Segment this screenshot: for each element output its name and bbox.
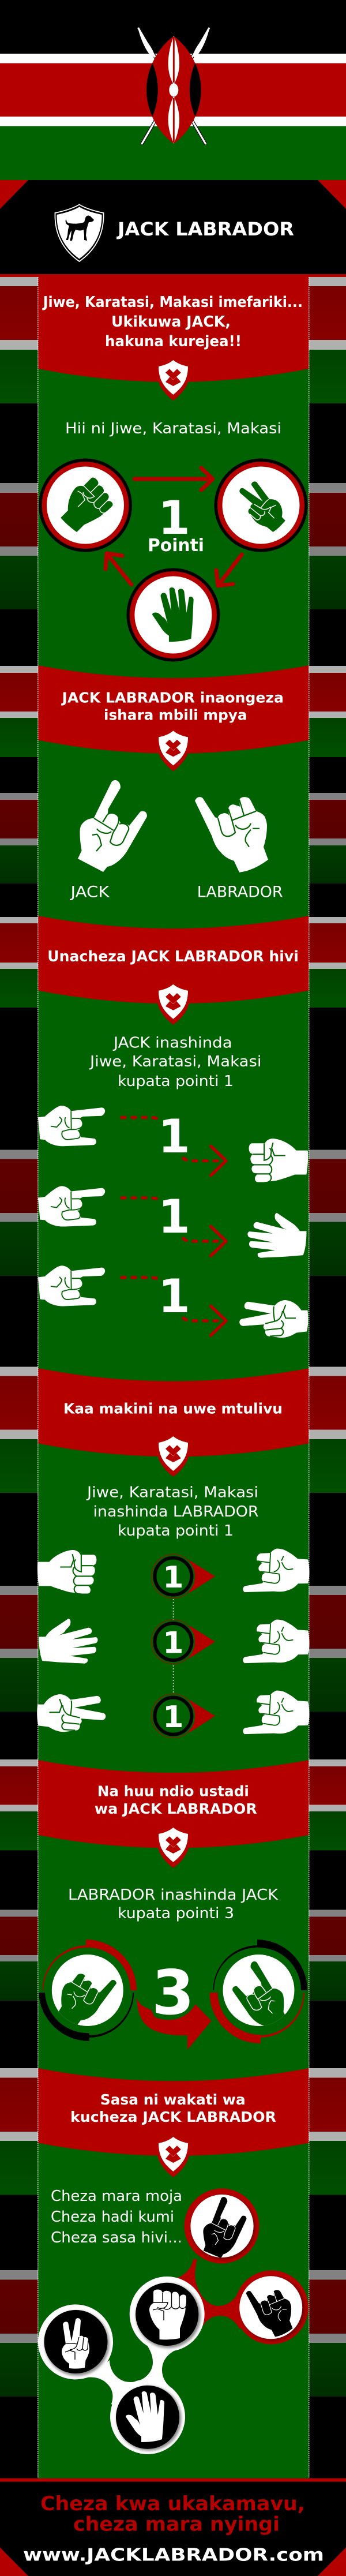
icon: rock hand bbox=[37, 1550, 96, 1594]
text: JACK beats rock paper scissors: kupata pointi 1 bbox=[118, 1073, 234, 1090]
text: rock paper scissors beat LABRADOR bbox=[86, 1484, 258, 1540]
score badge bbox=[151, 1694, 215, 1738]
footer slogan bbox=[40, 2492, 305, 2536]
arrow: dashed red bbox=[122, 1117, 226, 1175]
arrow: dashed red bbox=[122, 1278, 226, 1335]
heading: stay focused: Kaa makini na uwe mtulivu bbox=[63, 1401, 283, 1417]
heading: time to play bbox=[70, 2091, 276, 2125]
row: paper beats LABRADOR bbox=[39, 1611, 317, 1685]
text: LABRADOR beats JACK: kupata pointi 3 bbox=[118, 1905, 234, 1922]
circle: rock bbox=[130, 2277, 205, 2352]
score badge bbox=[151, 1620, 215, 1664]
banner 1 bbox=[0, 274, 346, 400]
icon: scissors hand bbox=[37, 1694, 106, 1732]
row: JACK beats rock bbox=[29, 1085, 308, 1182]
heading: two new signs bbox=[61, 689, 284, 724]
row: scissors beats LABRADOR bbox=[37, 1682, 317, 1756]
icon: paper hand bbox=[247, 1213, 306, 1258]
banner 4 bbox=[38, 1368, 309, 1477]
footer bbox=[0, 2478, 346, 2576]
footer slogan: Cheza kwa ukakamavu, bbox=[40, 2492, 305, 2515]
heading: mastery: wa JACK LABRADOR bbox=[95, 1800, 257, 1817]
heading: mastery bbox=[95, 1783, 257, 1817]
heading: two new signs: JACK LABRADOR inaongeza bbox=[61, 689, 284, 706]
icon: JACK hand sign bbox=[78, 780, 147, 872]
circle: LABRADOR red bbox=[235, 2270, 309, 2344]
score badge bbox=[151, 1555, 215, 1598]
icon: chevron shield bbox=[157, 2137, 189, 2177]
text: play now: Cheza hadi kumi bbox=[51, 2208, 174, 2226]
heading: intro: Ukikuwa JACK, bbox=[111, 313, 231, 331]
icon: crossed spears bbox=[138, 28, 210, 144]
number: 3: 3 bbox=[152, 1957, 194, 2028]
text: JACK beats rock paper scissors: JACK inashinda bbox=[112, 1035, 232, 1052]
icon: LABRADOR hand bbox=[242, 1540, 317, 1614]
icon: scissors circle bbox=[215, 458, 308, 552]
label: Pointi: Pointi bbox=[148, 536, 204, 556]
dotted side borders bbox=[38, 277, 309, 2478]
row: JACK beats paper bbox=[29, 1165, 306, 1258]
banner 3 bbox=[38, 916, 309, 1025]
row: rock beats LABRADOR bbox=[37, 1540, 317, 1614]
icon: JACK hand bbox=[29, 1245, 118, 1328]
heading: time to play: kucheza JACK LABRADOR bbox=[70, 2109, 276, 2125]
arrow: big curved red bbox=[137, 1997, 212, 2050]
arrow: scissors to paper bbox=[216, 555, 242, 586]
dotted connector between score badges bbox=[173, 1599, 174, 1694]
icon: LABRADOR hand bbox=[242, 1611, 317, 1685]
circle: JACK red bbox=[185, 2188, 260, 2263]
score badge: 1 bbox=[163, 1626, 183, 1660]
text: play now bbox=[51, 2188, 182, 2246]
text: JACK beats rock paper scissors: Jiwe, Karatasi, Makasi bbox=[89, 1053, 262, 1070]
number: 1: 1 bbox=[158, 1270, 190, 1323]
footer slogan: cheza mara nyingi bbox=[73, 2513, 280, 2536]
heading: intro bbox=[42, 294, 303, 350]
icon: chevron shield bbox=[157, 984, 189, 1025]
heading: intro: hakuna kurejea!! bbox=[105, 333, 242, 350]
text: play now: Cheza mara moja bbox=[51, 2188, 182, 2205]
diagram: rock paper scissors cycle bbox=[39, 458, 308, 661]
banner 2 bbox=[38, 665, 309, 771]
icon: chevron shield bbox=[157, 731, 189, 771]
heading: time to play: Sasa ni wakati wa bbox=[100, 2091, 246, 2108]
icon: paper circle bbox=[126, 568, 220, 661]
row: JACK beats scissors bbox=[29, 1245, 308, 1338]
text: LABRADOR beats JACK: LABRADOR inashinda JACK bbox=[68, 1886, 279, 1904]
side stripes: left bbox=[0, 277, 38, 2397]
heading: mastery: Na huu ndio ustadi bbox=[97, 1783, 249, 1799]
number: 1: 1 bbox=[158, 1110, 190, 1163]
icon: rock hand bbox=[249, 1139, 308, 1182]
label: LABRADOR: LABRADOR bbox=[197, 883, 283, 901]
icon: chevron shield bbox=[157, 1828, 189, 1868]
icon: LABRADOR hand sign bbox=[195, 797, 268, 873]
text: play now: Cheza sasa hivi... bbox=[51, 2229, 182, 2246]
icon: JACK hand bbox=[29, 1165, 118, 1248]
circle: scissors bbox=[38, 2304, 113, 2379]
icon: JACK hand bbox=[29, 1085, 118, 1168]
label: JACK: JACK bbox=[69, 883, 110, 901]
score badge: 1 bbox=[163, 1560, 183, 1595]
logo wordmark: JACK LABRADOR bbox=[116, 218, 294, 240]
icon: scissors hand bbox=[239, 1300, 308, 1338]
banner 5 bbox=[38, 1760, 309, 1868]
text: rock paper scissors intro: Hii ni Jiwe, Karatasi, Makasi bbox=[65, 420, 281, 437]
icon: LABRADOR circle with rings bbox=[39, 1940, 137, 2041]
text: rock paper scissors beat LABRADOR: inashinda LABRADOR bbox=[93, 1503, 258, 1521]
banner 6 bbox=[38, 2068, 309, 2177]
circle: paper bbox=[110, 2379, 185, 2454]
arrow: paper to rock bbox=[106, 553, 131, 585]
diagram: connected hand circles bbox=[38, 2188, 309, 2454]
white connector bbox=[86, 2346, 176, 2406]
icon: LABRADOR hand bbox=[242, 1682, 317, 1756]
icon: rock circle bbox=[39, 458, 132, 552]
text: LABRADOR beats JACK bbox=[68, 1886, 279, 1922]
number: 1 point: 1 bbox=[158, 491, 190, 545]
black logo band bbox=[0, 180, 346, 274]
score badge: 1 bbox=[163, 1700, 183, 1735]
icon: chevron shield bbox=[157, 1436, 189, 1477]
arrow: rock to scissors bbox=[134, 468, 213, 490]
icon: Maasai shield bbox=[146, 36, 201, 144]
red connector bbox=[173, 2259, 248, 2328]
text: JACK beats rock paper scissors bbox=[89, 1035, 262, 1090]
text: rock paper scissors beat LABRADOR: Jiwe, Karatasi, Makasi bbox=[86, 1484, 258, 1502]
number: 1: 1 bbox=[158, 1190, 190, 1244]
side stripes: right bbox=[309, 277, 346, 2397]
heading: how to play: Unacheza JACK LABRADOR hivi bbox=[47, 948, 299, 965]
icon: dog shield logo bbox=[55, 204, 104, 261]
icon: JACK circle with rings bbox=[210, 1940, 307, 2043]
central green panel bbox=[38, 274, 309, 2478]
flag of Kenya header bbox=[0, 0, 346, 180]
text: rock paper scissors beat LABRADOR: kupata pointi 1 bbox=[118, 1522, 234, 1540]
heading: two new signs: ishara mbili mpya bbox=[104, 706, 247, 724]
footer website: www.JACKLABRADOR.com bbox=[23, 2545, 324, 2566]
icon: chevron shield bbox=[157, 360, 189, 400]
heading: intro: Jiwe, Karatasi, Makasi imefariki... bbox=[42, 294, 303, 311]
diagram: LABRADOR beats JACK bbox=[39, 1940, 307, 2050]
icon: paper hand bbox=[39, 1619, 98, 1664]
arrow: dashed red bbox=[122, 1198, 226, 1256]
